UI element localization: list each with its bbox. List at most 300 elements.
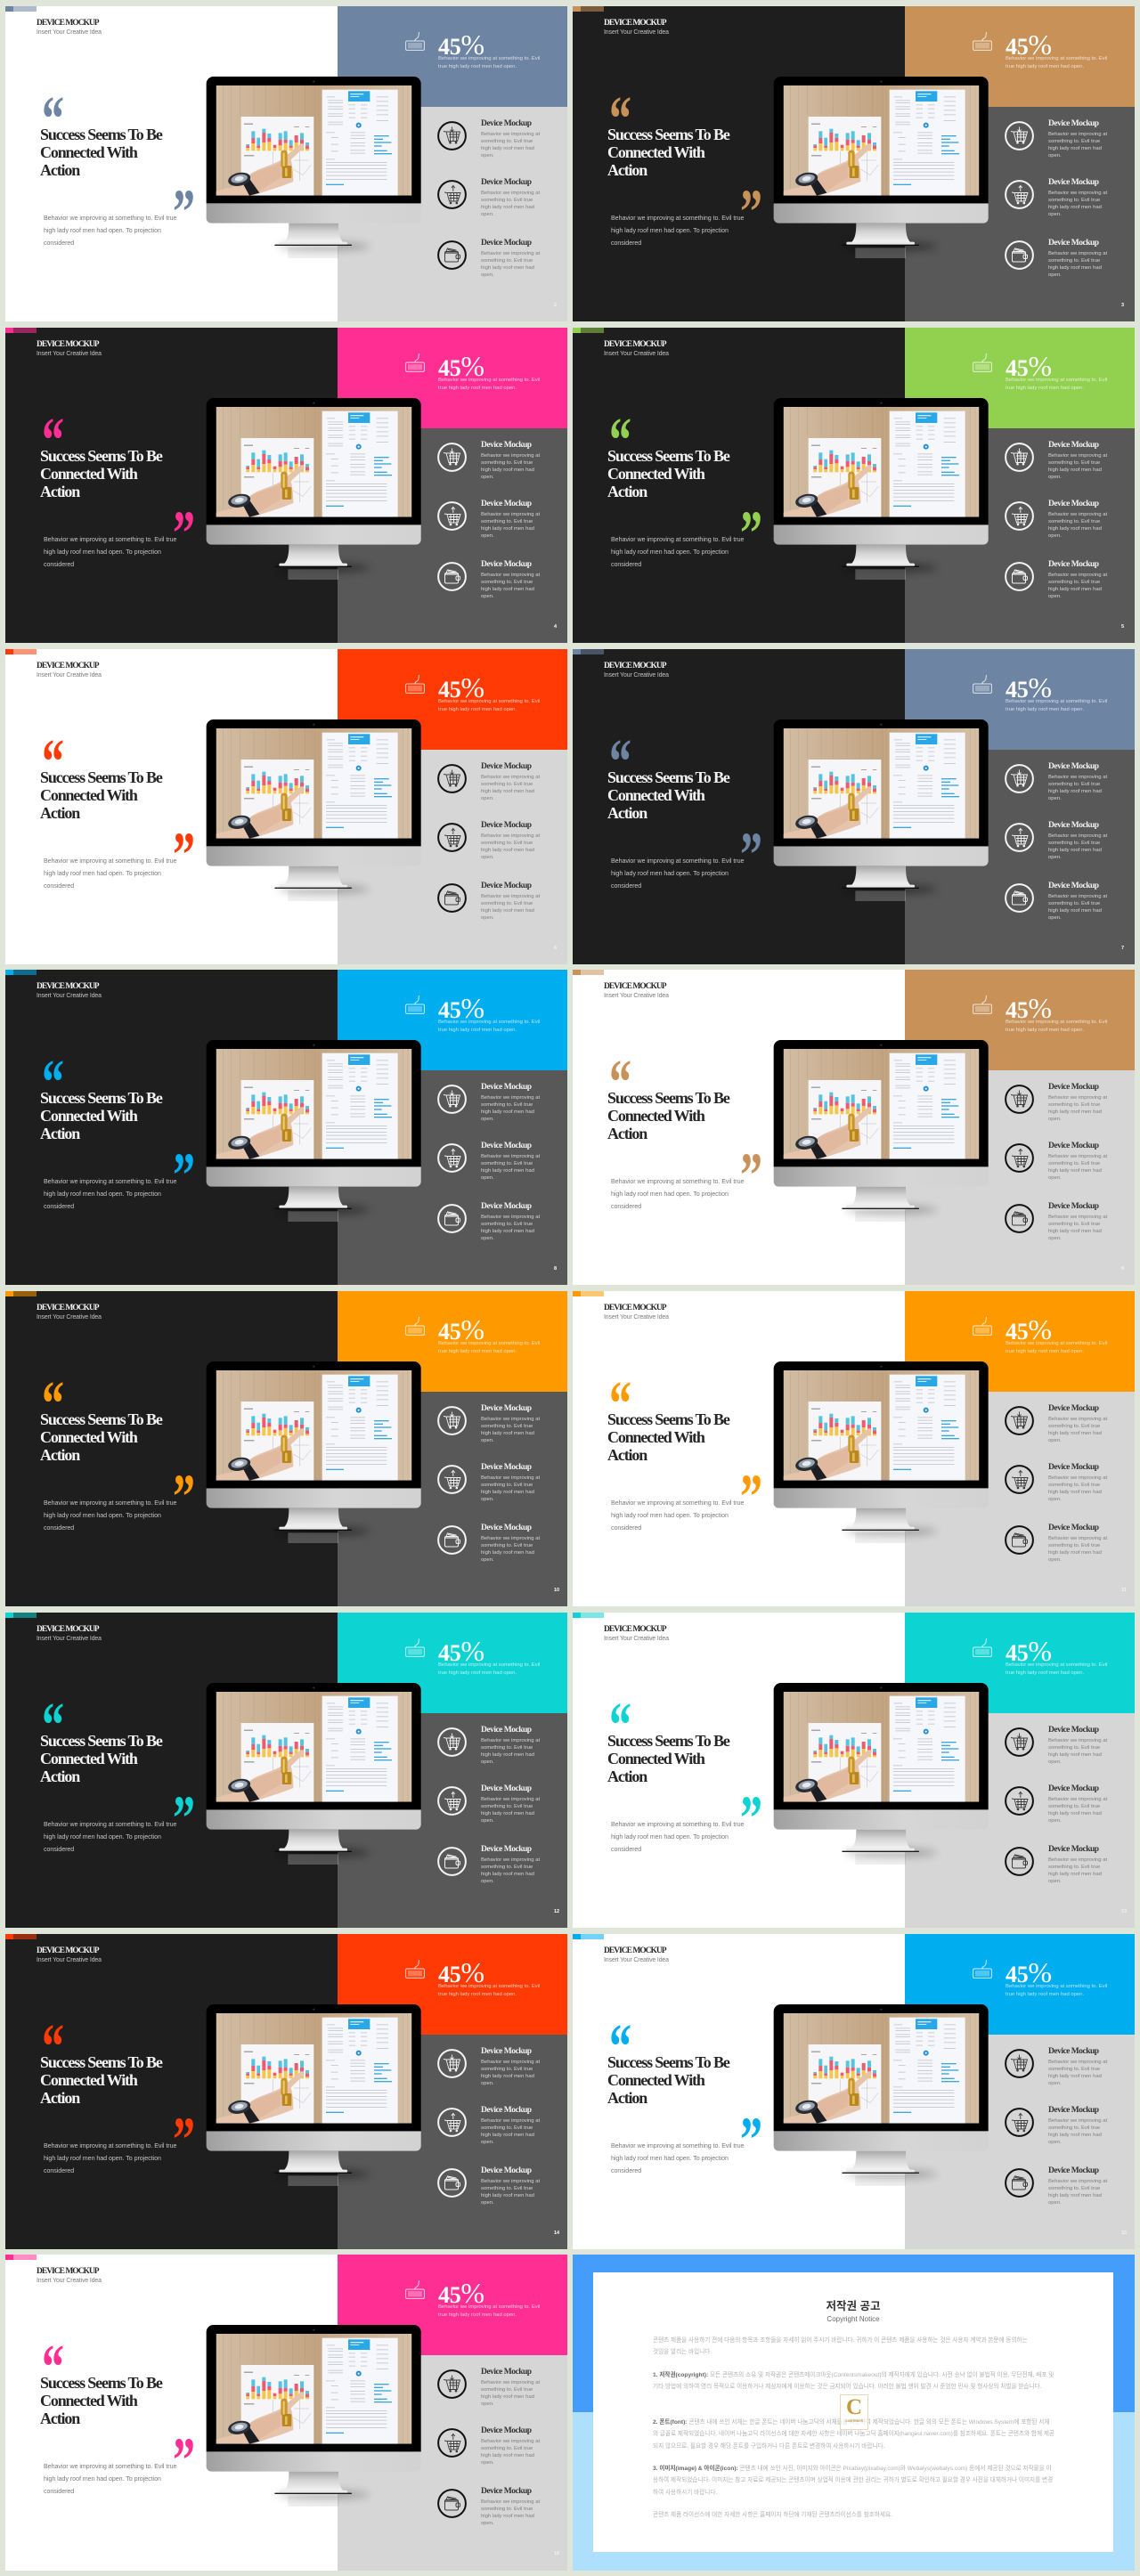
quote headline xyxy=(40,1732,191,1785)
quote headline: Action xyxy=(40,2409,79,2427)
heading: DEVICE MOCKUP xyxy=(37,1946,99,1955)
quote headline: Action xyxy=(40,483,79,500)
feature: wallet: something to. Evil true xyxy=(481,258,533,264)
feature: cart: open. xyxy=(1048,796,1062,801)
panel: feature list xyxy=(905,1070,1135,1285)
feature: cart: Behavior we improving at xyxy=(1048,1417,1107,1422)
stat description xyxy=(438,698,540,713)
body text: high lady roof men had open. To projection xyxy=(611,1833,729,1841)
accent tab xyxy=(5,6,37,12)
subheading: Insert Your Creative Idea xyxy=(37,1957,102,1963)
feature: wallet: Device Mockup xyxy=(481,1202,532,1211)
feature: wallet: Behavior we improving at xyxy=(1048,2179,1107,2184)
panel: slide 11 orange light xyxy=(573,1291,1135,1606)
heading: DEVICE MOCKUP xyxy=(37,2267,99,2276)
accent tab xyxy=(573,649,604,654)
body text: Behavior we improving at something to. Evil true xyxy=(44,2463,176,2470)
feature: cart add: high lady roof men had xyxy=(1048,848,1102,853)
stat number: 45% xyxy=(438,28,484,61)
icon: keyboard xyxy=(405,2280,425,2299)
feature: cart add xyxy=(1005,178,1108,217)
feature: cart add: Behavior we improving at xyxy=(481,512,540,517)
feature: cart add: high lady roof men had xyxy=(481,2453,534,2458)
subheading: Insert Your Creative Idea xyxy=(37,351,102,357)
body text: considered xyxy=(611,1524,641,1532)
accent tab xyxy=(573,328,604,333)
stat description xyxy=(438,2304,540,2319)
feature: wallet: something to. Evil true xyxy=(481,1865,533,1870)
stat number: 45% xyxy=(438,2277,484,2309)
closing quote mark: ” xyxy=(173,1460,195,1532)
panel: feature list xyxy=(338,428,567,643)
feature: cart add: open. xyxy=(481,212,494,217)
panel: feature list xyxy=(905,2035,1135,2249)
feature: wallet: Behavior we improving at xyxy=(481,894,540,899)
feature: cart add: something to. Evil true xyxy=(1048,2125,1100,2131)
feature: cart add: open. xyxy=(481,1818,494,1824)
feature: cart add: open. xyxy=(481,1497,494,1502)
body text xyxy=(44,1497,176,1534)
feature: cart add: something to. Evil true xyxy=(481,1804,533,1809)
feature: cart: Behavior we improving at xyxy=(481,1095,540,1101)
feature: cart add xyxy=(437,823,553,871)
heading: DEVICE MOCKUP xyxy=(37,662,99,670)
notice: font: 2. 폰트(font): 콘텐츠 내에 쓰인 서체는 한글 폰트는 네이버 나눔고딕의 서체들을 이용하여 제작되었습니다. 한글 외의 모든 폰트는 Windows System에 포함된 서체의 글꼴로 제작되었습니다. 네이버 나눔고딕 라이선스에 대한 자세한 사항은 네이버 나눔고딕 홈페이지(hangeul.naver.com)를 참조하세요. 폰트는 콘텐츠와 함께 제공되지 않으므로, 필요할 경우 해당 폰트를 구입하거나 다른 폰트로 변경하여 사용하시기 바랍니다. xyxy=(653,2419,1054,2450)
feature: wallet: open. xyxy=(1048,594,1062,599)
feature: cart: open. xyxy=(1048,475,1062,480)
quote headline: Connected With xyxy=(40,786,137,804)
body text: high lady roof men had open. To projection xyxy=(44,227,161,234)
feature: cart xyxy=(1005,2049,1120,2097)
feature: cart add: Behavior we improving at xyxy=(1048,2118,1107,2124)
quote headline: Success Seems To Be xyxy=(607,447,729,465)
subheading: Insert Your Creative Idea xyxy=(37,993,102,999)
quote headline: Connected With xyxy=(40,1750,137,1767)
stat number: 45% xyxy=(1006,671,1052,703)
page number: 9 xyxy=(1121,1266,1124,1272)
feature: cart xyxy=(1005,1406,1120,1454)
quote headline: Success Seems To Be xyxy=(40,126,162,143)
feature: cart: something to. Evil true xyxy=(481,460,533,466)
feature: cart xyxy=(1005,1085,1120,1133)
feature: wallet: high lady roof men had xyxy=(481,265,534,271)
panel: feature list xyxy=(338,2035,567,2249)
page number: 5 xyxy=(1121,624,1124,630)
stat description: true high lady roof men had open. xyxy=(1006,1991,1084,1996)
body text: Behavior we improving at something to. Evil true xyxy=(611,857,744,865)
quote headline: Connected With xyxy=(40,2071,137,2089)
quote headline: Connected With xyxy=(607,1428,704,1446)
feature: cart: Behavior we improving at xyxy=(481,1738,540,1743)
feature: cart add: Device Mockup xyxy=(481,500,532,508)
feature: wallet: open. xyxy=(1048,1557,1062,1563)
feature: cart add: Device Mockup xyxy=(1048,1142,1099,1150)
feature: cart add: something to. Evil true xyxy=(1048,1483,1100,1488)
closing quote mark: ” xyxy=(740,1782,762,1854)
body text xyxy=(44,855,176,892)
body text: high lady roof men had open. To projection xyxy=(44,1833,161,1841)
stat description: Behavior we improving at something to. Evil xyxy=(1006,1020,1107,1025)
feature: wallet: something to. Evil true xyxy=(1048,1543,1100,1548)
feature: cart add xyxy=(437,2428,553,2476)
feature: cart add: high lady roof men had xyxy=(1048,205,1102,210)
accent tab xyxy=(5,2255,37,2260)
feature: cart add xyxy=(437,1786,553,1834)
feature: cart: high lady roof men had xyxy=(1048,467,1102,473)
feature: wallet: high lady roof men had xyxy=(481,1229,534,1234)
feature: cart add: Device Mockup xyxy=(481,1463,532,1472)
stat number: 45% xyxy=(1006,1313,1052,1345)
closing quote mark: ” xyxy=(740,818,762,890)
body text xyxy=(611,2140,744,2177)
feature: cart add: Behavior we improving at xyxy=(1048,512,1107,517)
opening quote mark: “ xyxy=(609,1045,631,1117)
body text: high lady roof men had open. To projection xyxy=(611,1190,729,1198)
feature: cart add: Behavior we improving at xyxy=(1048,1154,1107,1159)
icon: keyboard xyxy=(405,32,425,51)
feature: cart: Behavior we improving at xyxy=(481,2060,540,2065)
feature: wallet: something to. Evil true xyxy=(1048,901,1100,906)
feature: wallet: open. xyxy=(481,1879,494,1884)
stat description: true high lady roof men had open. xyxy=(438,2312,517,2317)
feature: cart: open. xyxy=(481,475,494,480)
feature: cart: high lady roof men had xyxy=(1048,1109,1102,1115)
quote headline: Success Seems To Be xyxy=(40,2053,162,2071)
feature: wallet: Behavior we improving at xyxy=(1048,573,1107,578)
monitor mockup xyxy=(205,714,428,901)
feature: wallet: open. xyxy=(481,272,494,278)
feature: cart add: open. xyxy=(1048,2140,1062,2145)
feature: cart: something to. Evil true xyxy=(1048,782,1100,787)
body text: Behavior we improving at something to. Evil true xyxy=(44,857,176,865)
feature: cart add: something to. Evil true xyxy=(1048,1161,1100,1166)
monitor mockup xyxy=(207,398,421,580)
body text: Behavior we improving at something to. Evil true xyxy=(611,1499,744,1507)
body text xyxy=(44,536,176,568)
feature: wallet: Behavior we improving at xyxy=(481,1857,540,1863)
notice intro xyxy=(653,2335,1054,2359)
stat description: Behavior we improving at something to. Evil xyxy=(438,1984,540,1989)
quote headline: Action xyxy=(40,804,79,822)
feature: cart: open. xyxy=(1048,1438,1062,1443)
stat panel xyxy=(338,1613,567,1713)
quote headline: Connected With xyxy=(607,465,704,483)
closing quote mark: ” xyxy=(740,2103,762,2175)
feature: cart add: something to. Evil true xyxy=(1048,519,1100,524)
feature: cart: Device Mockup xyxy=(481,441,532,450)
feature: cart add: Device Mockup xyxy=(481,821,532,830)
panel: slide 7 blue-gray dark xyxy=(573,649,1135,964)
heading: DEVICE MOCKUP xyxy=(604,340,666,349)
feature: wallet: Behavior we improving at xyxy=(1048,1215,1107,1220)
body text: Behavior we improving at something to. Evil true xyxy=(44,1821,176,1828)
panel: feature list xyxy=(905,1713,1135,1928)
stat description: Behavior we improving at something to. Evil xyxy=(438,1341,540,1346)
feature: wallet: Behavior we improving at xyxy=(481,573,540,578)
stat description xyxy=(1006,698,1107,713)
quote headline: Action xyxy=(607,1767,647,1785)
feature: cart add: high lady roof men had xyxy=(1048,1811,1102,1816)
quote headline: Connected With xyxy=(607,2071,704,2089)
feature: cart: high lady roof men had xyxy=(1048,146,1102,151)
feature: cart: something to. Evil true xyxy=(1048,139,1100,144)
stat description: true high lady roof men had open. xyxy=(1006,1670,1084,1676)
feature: wallet xyxy=(1005,2168,1120,2216)
feature: wallet: something to. Evil true xyxy=(481,901,533,906)
feature: cart add: Device Mockup xyxy=(481,178,532,187)
feature: cart add xyxy=(1005,1143,1120,1191)
feature: wallet: something to. Evil true xyxy=(481,1222,533,1227)
feature: cart add: Behavior we improving at xyxy=(481,1797,540,1802)
closing quote mark: ” xyxy=(173,1139,195,1211)
feature: cart add: Behavior we improving at xyxy=(481,1154,540,1159)
quote headline: Success Seems To Be xyxy=(607,126,729,143)
panel: slide 4 pink dark xyxy=(5,328,567,643)
quote headline: Success Seems To Be xyxy=(40,768,162,786)
feature: wallet: Behavior we improving at xyxy=(1048,1536,1107,1541)
page number: 12 xyxy=(554,1909,559,1914)
feature: cart add: something to. Evil true xyxy=(1048,1804,1100,1809)
feature: cart: high lady roof men had xyxy=(481,789,534,794)
feature: wallet: Device Mockup xyxy=(481,2166,532,2175)
body text xyxy=(611,1175,744,1213)
page number: 7 xyxy=(1121,946,1124,951)
opening quote mark: “ xyxy=(42,1045,64,1117)
opening quote mark: “ xyxy=(609,2010,631,2082)
closing quote mark: ” xyxy=(173,2103,195,2175)
page number: 13 xyxy=(1121,1909,1127,1914)
feature: cart: something to. Evil true xyxy=(481,1102,533,1108)
body text: considered xyxy=(611,2167,641,2174)
feature: cart: something to. Evil true xyxy=(481,2067,533,2072)
opening quote mark: “ xyxy=(42,725,64,797)
stat description xyxy=(1006,1983,1107,1998)
page number: 2 xyxy=(554,303,557,308)
feature: wallet: Behavior we improving at xyxy=(481,2499,540,2505)
panel: feature list xyxy=(338,2355,567,2571)
subheading: Insert Your Creative Idea xyxy=(604,1314,669,1321)
stat panel xyxy=(338,1934,567,2035)
feature: cart add: high lady roof men had xyxy=(481,1168,534,1174)
accent tab xyxy=(5,649,37,654)
feature: cart add xyxy=(1005,2108,1120,2156)
copyright card xyxy=(593,2272,1113,2552)
feature: wallet: Device Mockup xyxy=(481,1845,532,1854)
heading: DEVICE MOCKUP xyxy=(37,1304,99,1312)
feature: wallet xyxy=(1005,1847,1120,1895)
stat description: Behavior we improving at something to. Evil xyxy=(1006,378,1107,383)
closing quote mark: ” xyxy=(740,1460,762,1532)
feature: cart: something to. Evil true xyxy=(1048,460,1100,466)
quote headline: Connected With xyxy=(607,1107,704,1125)
stat description xyxy=(1006,1019,1107,1034)
feature: cart: Behavior we improving at xyxy=(481,2380,540,2385)
feature: wallet: high lady roof men had xyxy=(481,1872,534,1877)
stat description xyxy=(1006,1340,1107,1355)
feature: cart: open. xyxy=(481,153,494,158)
feature: cart: high lady roof men had xyxy=(481,1431,534,1436)
stat panel xyxy=(338,1291,567,1392)
accent tab xyxy=(573,970,604,975)
feature: cart xyxy=(437,119,540,158)
stat panel xyxy=(905,328,1135,428)
feature: wallet xyxy=(1005,239,1108,278)
stat number: 45% xyxy=(1006,1635,1052,1667)
opening quote mark: “ xyxy=(42,1688,64,1760)
monitor mockup xyxy=(772,1999,995,2186)
feature: wallet: something to. Evil true xyxy=(481,2186,533,2191)
feature: wallet: high lady roof men had xyxy=(1048,1550,1102,1556)
body text: considered xyxy=(611,240,641,247)
feature: wallet: something to. Evil true xyxy=(1048,580,1100,585)
feature: cart add: Device Mockup xyxy=(1048,821,1099,830)
quote headline: Action xyxy=(607,2089,647,2107)
stat description xyxy=(438,1019,540,1034)
stat description: true high lady roof men had open. xyxy=(438,1670,517,1676)
quote headline: Success Seems To Be xyxy=(607,1089,729,1107)
feature: cart add: Behavior we improving at xyxy=(481,1475,540,1481)
feature: wallet: Device Mockup xyxy=(1048,1524,1099,1532)
feature: cart xyxy=(1005,1727,1120,1776)
feature: cart add: high lady roof men had xyxy=(1048,1168,1102,1174)
quote headline xyxy=(607,1410,759,1464)
stat number: 45% xyxy=(438,350,484,382)
monitor mockup xyxy=(772,1035,995,1222)
panel: feature list xyxy=(338,1713,567,1928)
feature: cart add: open. xyxy=(481,1175,494,1181)
panel: slide 6 red light xyxy=(5,649,567,964)
panel: feature list xyxy=(905,1392,1135,1606)
feature: cart add: something to. Evil true xyxy=(481,1161,533,1166)
icon: keyboard xyxy=(973,1638,992,1657)
quote headline xyxy=(40,768,191,822)
feature: wallet: Device Mockup xyxy=(1048,1845,1099,1854)
feature: wallet: Device Mockup xyxy=(481,2487,532,2496)
accent tab xyxy=(573,1613,604,1618)
feature: cart add: open. xyxy=(1048,1818,1062,1824)
feature: wallet: high lady roof men had xyxy=(481,2193,534,2198)
monitor mockup xyxy=(772,1678,995,1865)
heading: DEVICE MOCKUP xyxy=(604,982,666,991)
feature: wallet xyxy=(1005,883,1120,931)
quote headline xyxy=(40,2053,191,2107)
feature: cart: high lady roof men had xyxy=(1048,1431,1102,1436)
page number: 14 xyxy=(554,2231,559,2236)
feature: wallet: something to. Evil true xyxy=(1048,2186,1100,2191)
notice intro: 콘텐츠 제품을 사용하기 전에 다음의 항목과 조항들을 자세히 읽어 주시기 바랍니다. 귀하가 이 콘텐츠 제품을 사용하는 것은 사용자 계약과 본문에 동의하는 xyxy=(653,2337,1028,2344)
quote headline: Action xyxy=(40,161,79,179)
quote headline: Connected With xyxy=(40,465,137,483)
quote headline: Connected With xyxy=(40,143,137,161)
feature: cart add: Device Mockup xyxy=(481,1784,532,1793)
accent tab xyxy=(5,1934,37,1939)
feature: cart: Behavior we improving at xyxy=(1048,132,1107,137)
feature: wallet: something to. Evil true xyxy=(1048,1865,1100,1870)
feature: wallet xyxy=(437,560,540,599)
icon: keyboard xyxy=(973,353,992,372)
accent tab xyxy=(5,328,37,333)
panel: feature list xyxy=(338,107,567,321)
feature: wallet: high lady roof men had xyxy=(1048,587,1102,592)
body text: Behavior we improving at something to. Evil true xyxy=(611,1178,744,1185)
feature: wallet xyxy=(437,2489,553,2537)
stat number: 45% xyxy=(1006,350,1052,382)
subheading: Insert Your Creative Idea xyxy=(604,29,669,36)
icon: keyboard xyxy=(973,1960,992,1979)
feature: cart: Behavior we improving at xyxy=(1048,775,1107,780)
feature: wallet: high lady roof men had xyxy=(1048,265,1102,271)
stat description xyxy=(1006,1662,1107,1677)
feature: cart add xyxy=(1005,1465,1120,1513)
feature: cart: open. xyxy=(1048,1759,1062,1765)
opening quote mark: “ xyxy=(609,1688,631,1760)
feature: cart add: something to. Evil true xyxy=(481,1483,533,1488)
stat description: true high lady roof men had open. xyxy=(438,707,517,712)
quote headline: Success Seems To Be xyxy=(607,2053,729,2071)
body text: high lady roof men had open. To projection xyxy=(44,549,161,556)
body text: Behavior we improving at something to. Evil true xyxy=(611,1821,744,1828)
body text: high lady roof men had open. To projection xyxy=(44,2155,161,2162)
body text: considered xyxy=(44,561,74,568)
feature: cart add xyxy=(437,1143,553,1191)
page number: 16 xyxy=(554,2551,559,2556)
subheading: Insert Your Creative Idea xyxy=(604,993,669,999)
body text: high lady roof men had open. To projection xyxy=(611,2155,729,2162)
quote headline: Action xyxy=(40,1125,79,1142)
feature: cart: open. xyxy=(481,2401,494,2407)
feature: cart add xyxy=(437,500,540,539)
body text xyxy=(44,215,176,247)
body text: considered xyxy=(44,1846,74,1853)
body text: Behavior we improving at something to. Evil true xyxy=(44,215,176,222)
feature: wallet: open. xyxy=(481,1236,494,1241)
quote headline: Success Seems To Be xyxy=(607,1410,729,1428)
feature: wallet: Device Mockup xyxy=(1048,1202,1099,1211)
feature: cart: Device Mockup xyxy=(481,1726,532,1735)
quote headline: Connected With xyxy=(607,1750,704,1767)
body text: considered xyxy=(44,2488,74,2495)
stat panel xyxy=(338,2255,567,2355)
feature: wallet xyxy=(1005,1525,1120,1573)
quote headline xyxy=(40,126,162,179)
panel: slide 5 green dark xyxy=(573,328,1135,643)
feature: cart: Device Mockup xyxy=(481,119,532,128)
stat description: Behavior we improving at something to. Evil xyxy=(1006,1341,1107,1346)
quote headline: Action xyxy=(40,1446,79,1464)
accent tab xyxy=(573,6,604,12)
stat description: Behavior we improving at something to. Evil xyxy=(438,1662,540,1668)
body text: high lady roof men had open. To projection xyxy=(44,870,161,877)
quote headline: Success Seems To Be xyxy=(40,2374,162,2392)
feature: cart: Behavior we improving at xyxy=(481,132,540,137)
feature: cart: open. xyxy=(481,2081,494,2086)
feature: wallet: Device Mockup xyxy=(1048,560,1099,569)
feature: wallet xyxy=(437,239,540,278)
feature: cart add: open. xyxy=(1048,533,1062,539)
stat description: true high lady roof men had open. xyxy=(1006,64,1084,69)
feature: wallet xyxy=(437,883,553,931)
quote headline: Action xyxy=(40,2089,79,2107)
body text xyxy=(611,215,745,247)
quote headline xyxy=(40,2374,191,2427)
feature: cart: Device Mockup xyxy=(481,2368,532,2377)
stat description: Behavior we improving at something to. Evil xyxy=(438,378,540,383)
stat description: true high lady roof men had open. xyxy=(1006,707,1084,712)
heading: DEVICE MOCKUP xyxy=(37,1625,99,1634)
stat description xyxy=(438,378,540,390)
icon: keyboard xyxy=(405,995,425,1014)
quote headline xyxy=(40,1089,191,1142)
